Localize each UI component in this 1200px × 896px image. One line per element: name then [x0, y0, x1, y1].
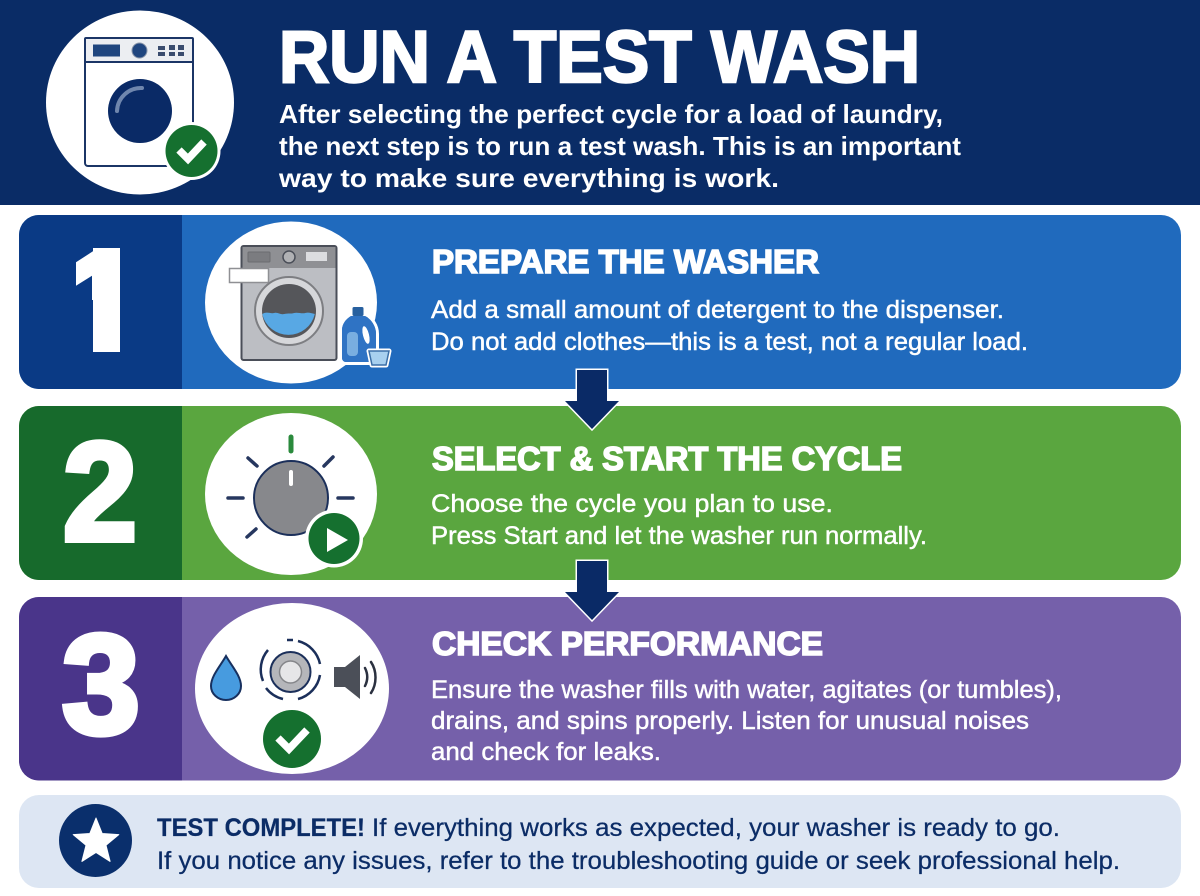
intro text: the next step is to run a test wash. This is an important: [279, 131, 961, 161]
icon: washing machine with check: [46, 10, 234, 194]
panel: step 1 prepare the washer: [19, 215, 1181, 389]
header band: [0, 0, 1200, 205]
step 2 description: [431, 490, 927, 550]
step number 1: [76, 248, 120, 352]
step number 3: 3: [62, 605, 140, 763]
panel: step 3 check performance: [19, 597, 1181, 780]
intro text: After selecting the perfect cycle for a load of laundry,: [279, 99, 943, 129]
arrow: step 1 to step 2: [565, 370, 619, 429]
step 3 description: Ensure the washer fills with water, agitates (or tumbles),: [431, 676, 1062, 704]
step 3 description: and check for leaks.: [431, 738, 661, 766]
step 2 heading: SELECT & START THE CYCLE: [432, 440, 902, 477]
step 3 heading: CHECK PERFORMANCE: [432, 625, 823, 662]
icon: star badge: [59, 804, 132, 877]
step number 1: 1: [60, 220, 143, 388]
step 1 description: [431, 296, 1028, 356]
intro text: [278, 99, 961, 193]
panel: test complete callout: [19, 795, 1181, 888]
step 3 description: drains, and spins properly. Listen for unusual noises: [431, 707, 1029, 735]
step number 2: 2: [63, 413, 137, 570]
step 1 description: Add a small amount of detergent to the dispenser.: [431, 296, 1004, 324]
icon: dial with play button: [205, 413, 377, 575]
step 3 description: [431, 676, 1062, 766]
step 2 description: Press Start and let the washer run normally.: [431, 522, 927, 550]
icon: washer with detergent: [205, 222, 389, 384]
title: RUN A TEST WASH: [279, 17, 920, 98]
icon: water, spin, sound and check: [195, 603, 389, 774]
callout text: [157, 814, 1120, 875]
callout text: If you notice any issues, refer to the troubleshooting guide or seek professional help.: [157, 847, 1120, 875]
callout text: If everything works as expected, your washer is ready to go.: [372, 814, 1060, 842]
intro text: way to make sure everything is work.: [278, 163, 779, 193]
callout text: TEST COMPLETE!: [157, 814, 365, 842]
step 2 description: Choose the cycle you plan to use.: [431, 490, 833, 518]
step 1 heading: PREPARE THE WASHER: [432, 243, 819, 280]
arrow: step 2 to step 3: [565, 561, 619, 620]
panel: step 2 select and start the cycle: [19, 406, 1181, 580]
step 1 description: Do not add clothes—this is a test, not a regular load.: [431, 328, 1028, 356]
